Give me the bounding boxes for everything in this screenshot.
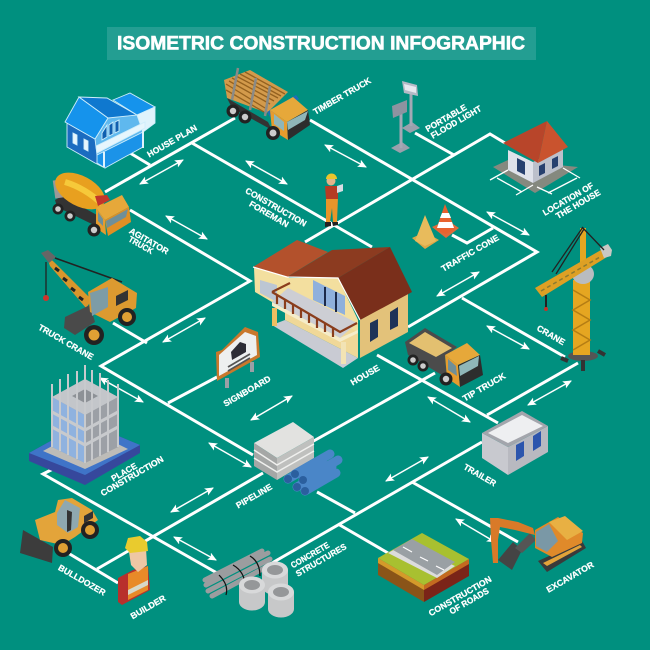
icon: bulldozer — [20, 498, 99, 563]
labels: AGITATOR — [127, 226, 171, 257]
labels: PIPELINE — [234, 482, 274, 510]
icon: concrete structures — [205, 551, 294, 618]
icon: crane — [535, 227, 612, 371]
icon: trailer — [482, 411, 548, 475]
icon: construction of roads — [378, 533, 469, 602]
labels: HOUSE PLAN — [145, 123, 199, 159]
labels: SIGNBOARD — [222, 373, 272, 409]
labels: PORTABLE — [424, 102, 469, 134]
icon: construction foreman — [325, 174, 343, 227]
labels: TIP TRUCK — [461, 370, 508, 403]
labels: BUILDER — [129, 593, 168, 621]
labels: CONCRETE — [289, 540, 331, 570]
labels: TRUCK CRANE — [37, 322, 96, 362]
labels: CONSTRUCTION — [99, 454, 165, 498]
labels: TRAFFIC CONE — [439, 232, 501, 274]
title: ISOMETRIC CONSTRUCTION INFOGRAPHIC — [117, 34, 525, 54]
icon: location of the house — [490, 121, 580, 195]
labels: OF ROADS — [447, 586, 491, 616]
labels: CRANE — [535, 323, 567, 347]
icon: house plan — [65, 93, 155, 168]
labels: FOREMAN — [247, 199, 291, 229]
labels: THE HOUSE — [554, 187, 602, 221]
icon: signboard — [216, 327, 260, 388]
icon: central house — [253, 240, 412, 368]
icon: place construction — [29, 365, 140, 485]
labels: PLACE — [109, 461, 139, 483]
icon: timber truck — [224, 68, 310, 140]
labels: FLOOD LIGHT — [429, 103, 484, 141]
icon: portable flood light — [391, 81, 420, 153]
labels: TRAILER — [462, 462, 499, 489]
labels: TIMBER TRUCK — [311, 75, 373, 117]
icon: builder — [118, 536, 150, 605]
icon: agitator truck — [49, 165, 131, 236]
icon: excavator — [490, 516, 586, 572]
labels — [37, 75, 602, 621]
double-headed arrows — [100, 145, 571, 560]
labels: CONSTRUCTION — [427, 574, 493, 618]
icon: traffic cones — [412, 204, 459, 249]
icon: truck crane — [41, 250, 137, 345]
flowchart connector lines — [43, 118, 578, 583]
labels: TRUCK — [127, 234, 156, 256]
icon: tip truck — [405, 328, 483, 387]
labels: LOCATION OF — [541, 180, 595, 218]
title — [107, 27, 536, 60]
labels: CONSTRUCTION — [244, 185, 308, 229]
labels: STRUCTURES — [294, 541, 348, 579]
labels: BULLDOZER — [57, 562, 108, 598]
labels: EXCAVATOR — [545, 559, 596, 595]
icon: pipeline — [254, 422, 338, 495]
labels: HOUSE — [349, 363, 382, 387]
